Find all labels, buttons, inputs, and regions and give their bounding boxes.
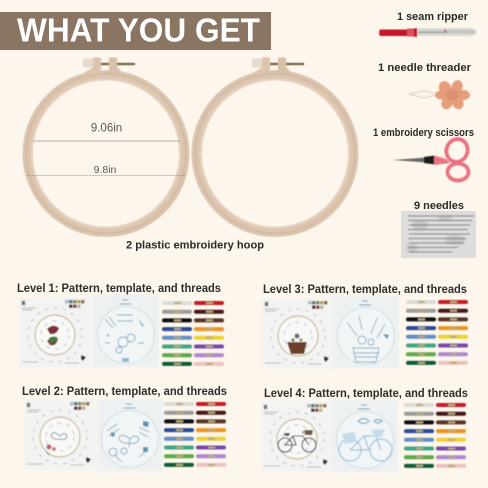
- image: level 1 pattern: [19, 297, 91, 368]
- icon: scissors: [393, 136, 471, 180]
- image: level 1 template: [93, 295, 159, 367]
- panel: level 3: [262, 284, 467, 369]
- icon: seam ripper: [379, 28, 476, 37]
- image: level 4 pattern: [261, 401, 333, 472]
- panel: seam ripper: [379, 11, 476, 37]
- image: needle pack: [401, 211, 476, 258]
- heading: level 4: Level 4: Pattern, template, and threads: [264, 388, 468, 400]
- panel: needle threader: [378, 62, 472, 111]
- image: level 2 template: [97, 399, 163, 471]
- heading: level 3: Level 3: Pattern, template, and threads: [263, 284, 467, 296]
- image: level 2 pattern: [24, 399, 96, 470]
- image: level 3 template: [333, 296, 399, 368]
- panel: needles: [401, 200, 476, 258]
- chart: level 1 threads: [164, 302, 222, 365]
- panel: embroidery scissors: [373, 127, 474, 180]
- label: scissors: 1 embroidery scissors: [373, 127, 474, 139]
- icon: right hoop: [192, 58, 358, 236]
- label: needle threader: 1 needle threader: [378, 62, 472, 74]
- panel: level 1: [17, 283, 222, 368]
- title banner: WHAT YOU GET: [17, 12, 260, 48]
- panel: embroidery hoops: [23, 58, 358, 252]
- label: seam ripper: 1 seam ripper: [397, 11, 469, 23]
- panel: level 4: [261, 388, 468, 472]
- measurement: outer diameter: 9.8in: [94, 164, 117, 176]
- label: needles: 9 needles: [414, 200, 464, 212]
- panel: level 2: [22, 386, 227, 471]
- heading: level 2: Level 2: Pattern, template, and threads: [22, 386, 227, 398]
- caption: hoops: 2 plastic embroidery hoop: [126, 240, 264, 252]
- image: level 4 template: [332, 400, 398, 472]
- heading: level 1: Level 1: Pattern, template, and threads: [17, 283, 221, 295]
- image: level 3 pattern: [262, 298, 334, 369]
- icon: needle threader: [409, 79, 470, 111]
- chart: level 4 threads: [406, 404, 464, 467]
- icon: left hoop with measurements: [23, 58, 189, 236]
- measurement: inner diameter: 9.06in: [91, 122, 122, 134]
- chart: level 2 threads: [166, 403, 224, 466]
- chart: level 3 threads: [408, 301, 466, 364]
